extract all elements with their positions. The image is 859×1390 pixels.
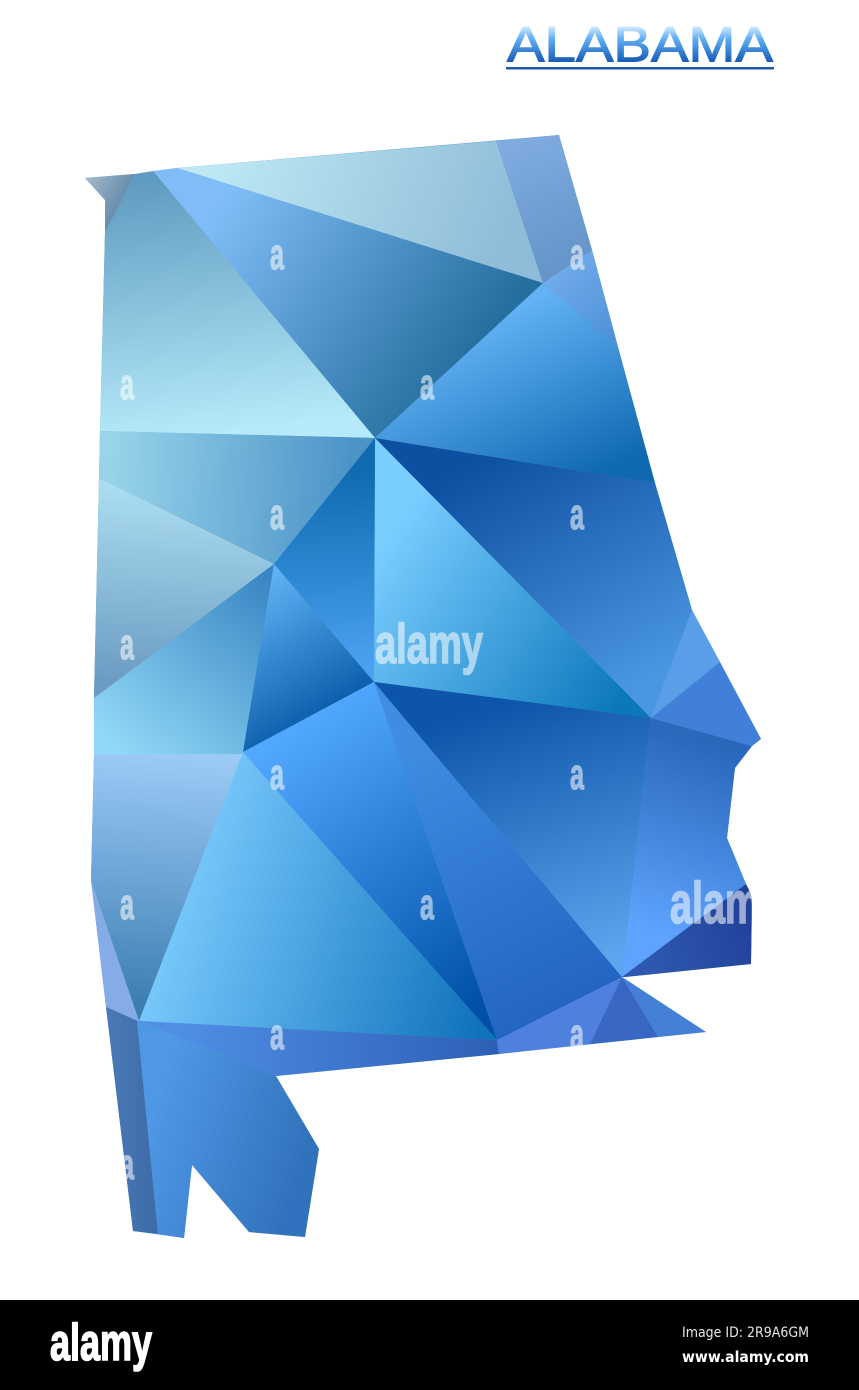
facet: south-east fan three bbox=[622, 977, 706, 1037]
facet: dark south-east bbox=[622, 884, 752, 977]
facet: north-east sliver bbox=[543, 250, 618, 347]
facet: panhandle bbox=[137, 1021, 319, 1238]
watermark: a bbox=[120, 620, 134, 669]
low-poly map of Alabama bbox=[85, 135, 761, 1238]
watermark bbox=[120, 230, 782, 1189]
facet: top sky-blue triangle bbox=[177, 141, 543, 283]
facet: north-east corner bbox=[496, 135, 592, 283]
facet: west band bbox=[99, 431, 375, 564]
watermark: a bbox=[570, 230, 584, 279]
facet: east central bbox=[375, 438, 692, 718]
watermark: alamy bbox=[375, 612, 483, 675]
title: Alabama: ALABAMA bbox=[507, 16, 774, 72]
watermark: a bbox=[420, 880, 434, 929]
facet: north-west pale bbox=[100, 171, 375, 438]
facet: east tip bbox=[651, 662, 761, 746]
watermark: a bbox=[570, 750, 584, 799]
facet: south-west sliver bbox=[91, 880, 139, 1021]
watermark: a bbox=[570, 490, 584, 539]
watermark: a bbox=[120, 880, 134, 929]
watermark: a bbox=[120, 360, 134, 409]
facet: east sliver bbox=[651, 610, 720, 718]
facet: south-east fan two bbox=[590, 977, 658, 1044]
facet: south large triangle bbox=[139, 752, 497, 1040]
facet: north centre blue triangle bbox=[153, 168, 543, 438]
facet: west lower bbox=[94, 564, 274, 754]
watermark: a bbox=[570, 1010, 584, 1059]
watermark: a bbox=[270, 230, 284, 279]
watermark: a bbox=[270, 490, 284, 539]
footer bar bbox=[0, 1300, 859, 1390]
footer logo: alamy bbox=[50, 1314, 152, 1372]
website: www.alamy.com bbox=[682, 1348, 809, 1366]
facet: north-west notch bbox=[85, 174, 135, 232]
facet: southern strip bbox=[139, 1021, 499, 1076]
facet: west triangle bbox=[94, 478, 274, 698]
facet: panhandle west strip bbox=[106, 1007, 158, 1234]
facet: central bright triangle bbox=[374, 438, 651, 718]
facet: south-west band bbox=[91, 754, 243, 1021]
facet: centre small triangle bbox=[243, 564, 374, 752]
watermark: a bbox=[270, 750, 284, 799]
image id: Image ID: 2R9A6GM bbox=[682, 1325, 809, 1341]
facet: centre dark column bbox=[274, 438, 375, 682]
facet: east lower bbox=[622, 718, 752, 977]
facet: south centre blue bbox=[374, 682, 622, 1040]
facet: south centre dark triangle bbox=[243, 682, 497, 1040]
watermark: a bbox=[270, 1010, 284, 1059]
facet: north-east large bbox=[375, 283, 655, 483]
facet: south-east fan one bbox=[497, 977, 622, 1054]
watermark: alamy bbox=[670, 871, 782, 936]
watermark: a bbox=[120, 1140, 134, 1189]
watermark: a bbox=[420, 360, 434, 409]
facet: south-east large bbox=[374, 682, 651, 977]
